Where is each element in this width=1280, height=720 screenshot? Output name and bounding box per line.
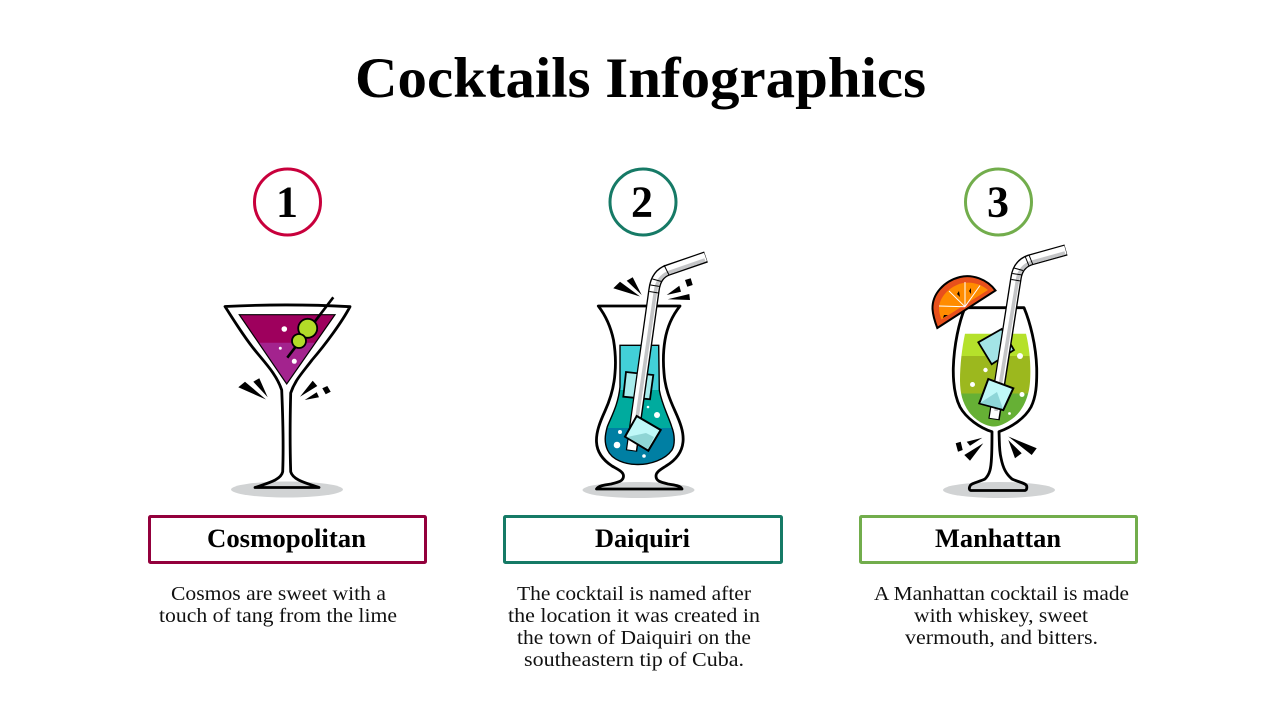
number badge 3: 3: [987, 178, 1009, 226]
description: Cosmopolitan: Cosmos are sweet with a: [171, 583, 386, 605]
description: Manhattan: [874, 583, 1129, 649]
description: Daiquiri: [508, 583, 760, 671]
panel: Daiquiri: [504, 169, 782, 671]
icon: orange slice: [932, 276, 996, 328]
title: Cocktails Infographics: [355, 47, 926, 110]
icon: martini glass: [225, 297, 350, 498]
label box: Daiquiri: [504, 516, 782, 562]
description: Manhattan: A Manhattan cocktail is made: [874, 583, 1129, 605]
panel: Cosmopolitan: [150, 169, 426, 627]
number badge 2: [610, 169, 676, 235]
number badge 2: 2: [631, 178, 653, 226]
description: Daiquiri: the location it was created in: [508, 605, 760, 627]
icon: hurricane glass with straw: [582, 257, 706, 498]
number badge 1: [254, 169, 320, 235]
number badge 3: [966, 169, 1032, 235]
description: Daiquiri: the town of Daiquiri on the: [517, 627, 751, 649]
panel: Manhattan: [860, 169, 1136, 649]
label box: Manhattan: [860, 516, 1136, 562]
label box: Manhattan: Manhattan: [935, 524, 1062, 553]
description: Manhattan: vermouth, and bitters.: [905, 627, 1098, 649]
icon: wine glass with straw and orange slice: [932, 250, 1066, 498]
description: Manhattan: with whiskey, sweet: [914, 605, 1088, 627]
number badge 1: 1: [276, 178, 298, 226]
label box: Daiquiri: Daiquiri: [595, 524, 690, 553]
description: Cosmopolitan: [159, 583, 397, 627]
label box: Cosmopolitan: [150, 516, 426, 562]
label box: Cosmopolitan: Cosmopolitan: [207, 524, 367, 553]
description: Cosmopolitan: touch of tang from the lime: [159, 605, 397, 627]
description: Daiquiri: southeastern tip of Cuba.: [524, 649, 744, 671]
description: Daiquiri: The cocktail is named after: [517, 583, 751, 605]
